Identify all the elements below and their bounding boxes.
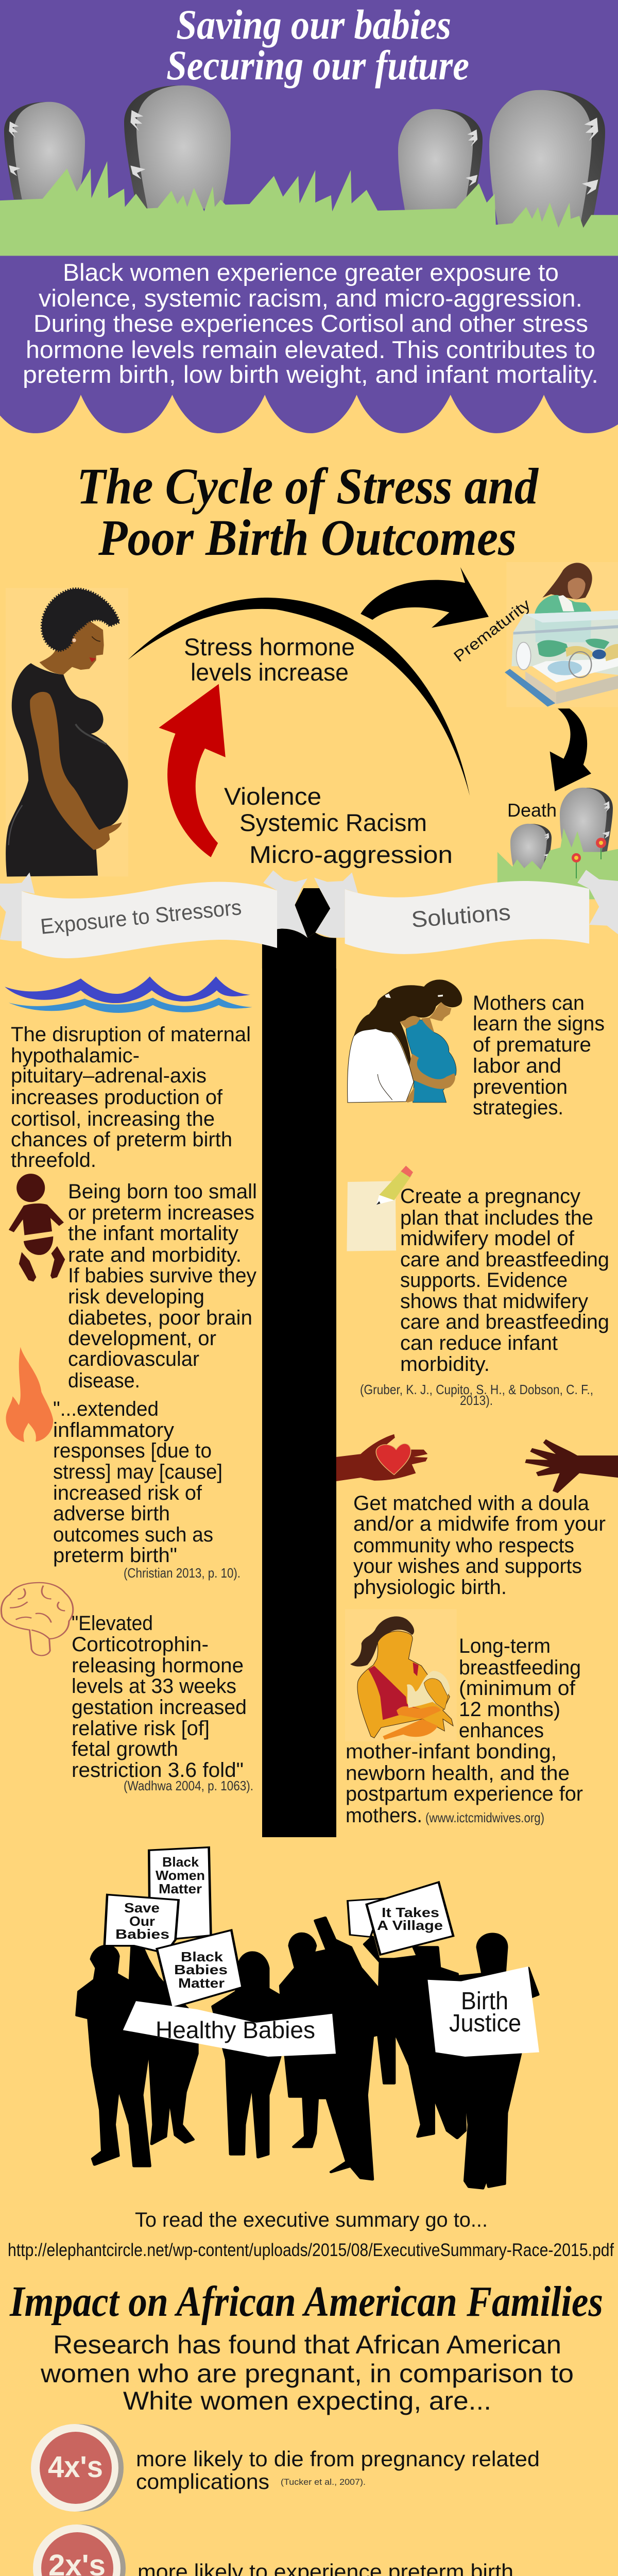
text: long-term breastfeeding: (minimum of — [459, 1677, 576, 1700]
text: disruption of maternal axis: threefold. — [11, 1149, 96, 1172]
banner: solutions — [314, 870, 618, 954]
text: mothers can learn: labor and — [473, 1055, 561, 1077]
central black column — [262, 888, 336, 1837]
text: disruption of maternal axis: hypothalamic- — [11, 1044, 140, 1067]
illustration: protest crowd with signs — [77, 1848, 539, 2188]
text: pregnancy plan: morbidity. — [400, 1353, 490, 1376]
text: research intro: White women expecting, are... — [123, 2386, 491, 2415]
text: stressors list — [224, 783, 453, 868]
text: born too small: development, or — [68, 1327, 216, 1350]
sign: black women matter: Black — [162, 1854, 199, 1870]
badge: 4x's — [48, 2450, 103, 2484]
sign: birth justice: Justice — [449, 2010, 521, 2037]
text: doula: community who respects — [353, 1534, 574, 1557]
quote: corticotrophin: (Wadhwa 2004, p. 1063). — [124, 1778, 253, 1793]
text: doula: and/or a midwife from your — [353, 1513, 606, 1535]
stat: 2x — [33, 2524, 513, 2576]
quote: inflammatory responses: stress] may [cause] — [53, 1461, 222, 1483]
quote: corticotrophin: Corticotrophin- — [72, 1633, 209, 1656]
banner: exposure to stressors — [0, 870, 307, 958]
illustration: mother and midwife — [348, 979, 462, 1103]
text: long-term breastfeeding: breastfeeding — [459, 1656, 581, 1679]
sign: save our babies — [105, 1894, 179, 1953]
intro paragraph: violence, systemic racism, and micro-aggression. — [39, 284, 582, 312]
icon: baby — [9, 1174, 65, 1282]
stat: 4x: complications — [136, 2469, 269, 2494]
silhouettes — [77, 1918, 538, 2188]
text: doula: Get matched with a doula — [353, 1492, 590, 1515]
banner: solutions: Solutions — [410, 900, 511, 933]
sign: black babies matter: Black — [181, 1949, 224, 1964]
text: long-term breastfeeding: newborn health, and the — [346, 1762, 570, 1785]
purple header background with scalloped edge — [0, 0, 618, 433]
quote: corticotrophin: restriction 3.6 fold" — [72, 1759, 244, 1782]
text: disruption of maternal axis: The disruption of maternal — [11, 1023, 251, 1046]
banner: healthy babies: Healthy Babies — [156, 2016, 315, 2043]
text: doula — [353, 1492, 606, 1599]
text: long-term breastfeeding: mother-infant bonding, — [346, 1740, 557, 1763]
sign: save our babies: Babies — [115, 1926, 169, 1942]
quote: corticotrophin: releasing hormone — [72, 1654, 244, 1677]
text: born too small: rate and morbidity. — [68, 1244, 242, 1266]
text: born too small: risk developing — [68, 1285, 204, 1308]
sign: save our babies: Save — [124, 1900, 160, 1916]
text: born too small: If babies survive they — [68, 1264, 256, 1287]
text: pregnancy plan: care and breastfeeding — [400, 1248, 609, 1271]
quote: corticotrophin — [72, 1612, 253, 1793]
text: pregnancy plan: midwifery model of — [400, 1227, 575, 1250]
heading: the cycle of stress: Poor Birth Outcomes — [98, 509, 517, 566]
text: stressors list: Violence — [224, 783, 321, 810]
sign: it takes a village — [348, 1882, 453, 1955]
text: mothers can learn: learn the signs — [473, 1012, 605, 1035]
sign: it takes a village: It Takes — [382, 1905, 439, 1920]
arrow: red upward arrow — [159, 684, 226, 857]
intro paragraph: Black women experience greater exposure to — [63, 259, 559, 286]
text: mothers can learn: strategies. — [473, 1096, 563, 1119]
heading: the cycle of stress: The Cycle of Stress and — [77, 457, 539, 515]
text: mothers can learn: of premature — [473, 1033, 591, 1056]
quote: inflammatory responses: "...extended — [53, 1398, 159, 1420]
heading: the cycle of stress — [77, 457, 539, 566]
quote: corticotrophin: fetal growth — [72, 1738, 178, 1760]
icon: hand holding heart — [336, 1434, 427, 1481]
text: stress hormone levels increase — [184, 633, 355, 686]
quote: inflammatory responses: responses [due to — [53, 1439, 212, 1462]
sign: black babies matter: Babies — [174, 1962, 228, 1977]
text: born too small — [68, 1180, 257, 1392]
text: pregnancy plan: 2013). — [460, 1393, 493, 1408]
badge — [33, 2524, 126, 2576]
text: born too small: cardiovascular — [68, 1348, 199, 1370]
text: long-term breastfeeding: postpartum experience for — [346, 1783, 583, 1805]
text: mothers can learn: Mothers can — [473, 992, 585, 1014]
sign: black babies matter — [157, 1930, 243, 2008]
text: pregnancy plan: care and breastfeeding — [400, 1311, 609, 1333]
text: research intro: Research has found that African American — [53, 2330, 561, 2359]
text: pregnancy plan: plan that includes the — [400, 1207, 593, 1229]
sign: birth justice — [427, 1967, 539, 2057]
quote: inflammatory responses: increased risk of — [53, 1482, 202, 1504]
icon: notepad and pencil — [347, 1166, 413, 1251]
illustration: tombstones and grass — [0, 86, 618, 256]
illustration: pregnant woman — [6, 588, 128, 876]
stat: 4x: more likely to die from pregnancy related — [136, 2447, 540, 2471]
intro paragraph: During these experiences Cortisol and other stress — [33, 310, 588, 337]
label: prematurity: Prematurity — [451, 596, 534, 666]
banner: healthy babies — [123, 2001, 336, 2057]
intro paragraph: hormone levels remain elevated. This contributes to — [26, 336, 595, 363]
text: disruption of maternal axis: chances of preterm birth — [11, 1128, 232, 1151]
quote: corticotrophin: "Elevated — [72, 1612, 153, 1635]
text: born too small: or preterm increases — [68, 1201, 254, 1224]
text: mothers can learn: prevention — [473, 1076, 568, 1098]
text: born too small: the infant mortality — [68, 1222, 238, 1245]
sign: black women matter: Women — [156, 1868, 205, 1883]
arrow: black arc to prematurity — [128, 567, 489, 796]
text: stressors list: Systemic Racism — [239, 809, 427, 836]
text: disruption of maternal axis: cortisol, increasing the — [11, 1108, 215, 1130]
text: disruption of maternal axis: pituitary–adrenal-axis — [11, 1064, 207, 1087]
text: pregnancy plan: can reduce infant — [400, 1332, 558, 1354]
text: born too small: diabetes, poor brain — [68, 1307, 252, 1329]
illustration: nurse and incubator — [505, 562, 618, 707]
sign: black women matter — [149, 1848, 211, 1941]
sign: birth justice: Birth — [461, 1988, 508, 2015]
sign: black babies matter: Matter — [178, 1975, 225, 1991]
illustration: death tombstones — [497, 788, 618, 899]
text: long-term breastfeeding: mothers. — [346, 1804, 422, 1827]
text: executive summary link — [8, 2209, 614, 2260]
title — [166, 1, 469, 89]
sign: black women matter: Matter — [159, 1881, 202, 1896]
header panel — [0, 0, 618, 433]
quote: inflammatory responses: (Christian 2013, p. 10). — [124, 1565, 241, 1581]
text: stressors list: Micro-aggression — [249, 841, 453, 868]
text: executive summary link: To read the executive summary go to... — [135, 2209, 488, 2231]
icon: flame — [6, 1347, 53, 1442]
text: long-term breastfeeding — [346, 1635, 583, 1827]
intro paragraph — [23, 259, 598, 388]
label: death: Death — [507, 800, 557, 821]
sign: it takes a village: A Village — [377, 1918, 443, 1933]
quote: corticotrophin: gestation increased — [72, 1696, 247, 1719]
text: long-term breastfeeding: 12 months) — [459, 1698, 560, 1721]
text: doula: your wishes and supports — [353, 1555, 582, 1578]
quote: inflammatory responses: preterm birth" — [53, 1544, 177, 1567]
quote: inflammatory responses — [53, 1398, 241, 1581]
text: doula: physiologic birth. — [353, 1576, 507, 1599]
text: disruption of maternal axis: increases production of — [11, 1086, 223, 1109]
stat: 4x — [31, 2424, 540, 2512]
text: stress hormone levels increase: levels increase — [191, 658, 349, 686]
text: disruption of maternal axis — [11, 1023, 251, 1172]
text: mothers can learn — [473, 992, 605, 1119]
quote: corticotrophin: relative risk [of] — [72, 1717, 210, 1740]
badge — [31, 2424, 124, 2512]
icon: brain — [1, 1583, 73, 1655]
title: Securing our future — [166, 42, 469, 89]
intro paragraph: preterm birth, low birth weight, and infant mortality. — [23, 361, 598, 388]
icon: reaching hand — [525, 1439, 618, 1493]
banner: exposure to stressors: Exposure to Stressors — [39, 895, 243, 939]
text: pregnancy plan — [360, 1185, 609, 1408]
text: pregnancy plan: supports. Evidence — [400, 1269, 568, 1292]
text: born too small: Being born too small — [68, 1180, 257, 1203]
text: pregnancy plan: Create a pregnancy — [400, 1185, 580, 1208]
quote: inflammatory responses: adverse birth — [53, 1502, 170, 1525]
stat: 4x: (Tucker et al., 2007). — [281, 2477, 366, 2487]
text: long-term breastfeeding: (www.ictcmidwives.org) — [425, 1810, 544, 1825]
text: research intro — [40, 2330, 574, 2415]
quote: inflammatory responses: outcomes such as — [53, 1523, 213, 1546]
title: Saving our babies — [176, 1, 451, 48]
arrow: prematurity to death — [550, 708, 591, 791]
quote: corticotrophin: levels at 33 weeks — [72, 1675, 236, 1698]
text: long-term breastfeeding: enhances — [459, 1719, 544, 1742]
text: born too small: disease. — [68, 1369, 140, 1392]
sign: save our babies: Our — [129, 1913, 155, 1929]
illustration: breastfeeding mother — [345, 1609, 457, 1741]
text: stress hormone levels increase: Stress hormone — [184, 633, 355, 660]
text: long-term breastfeeding: Long-term — [459, 1635, 551, 1657]
text: research intro: women who are pregnant, in comparison to — [40, 2359, 574, 2388]
quote: inflammatory responses: inflammatory — [53, 1419, 174, 1442]
text: pregnancy plan: shows that midwifery — [400, 1290, 588, 1313]
icon: water waves — [5, 976, 252, 1013]
